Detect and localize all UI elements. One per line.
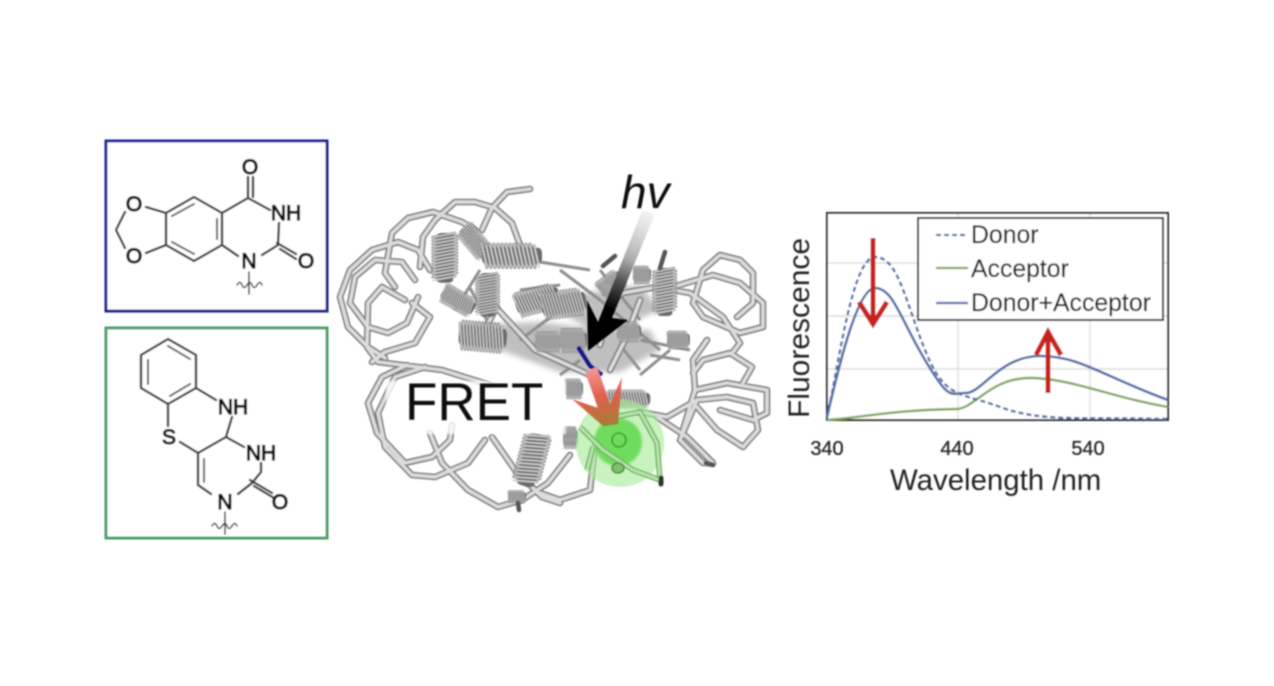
- legend: Donor: [971, 222, 1039, 249]
- x-axis ticks: 440: [940, 438, 974, 460]
- histone helices: [434, 222, 690, 502]
- atom labels: donor: O: [126, 245, 142, 268]
- arrow: acceptor increase: [1036, 332, 1061, 393]
- panel: acceptor nucleobase structure: [106, 328, 327, 538]
- arrow: donor decrease: [859, 238, 887, 324]
- legend: [918, 218, 1163, 320]
- FRET label backing band: [386, 381, 566, 434]
- donor stick: [578, 347, 602, 375]
- protein: nucleosome ribbon structure: [340, 189, 767, 510]
- legend: Donor+Acceptor: [971, 290, 1151, 317]
- green acceptor glow: [576, 399, 664, 487]
- central core strands: [455, 262, 690, 375]
- atom labels: donor: N: [241, 250, 257, 273]
- legend: Acceptor: [971, 256, 1069, 283]
- text: hv: hv: [621, 166, 673, 218]
- chart: fluorescence spectra: [783, 213, 1168, 497]
- atom labels: donor: O: [298, 250, 314, 273]
- atom labels: acceptor: NH: [246, 442, 276, 465]
- bonds: donor skeleton: [116, 177, 296, 294]
- curve: acceptor: [827, 378, 1168, 420]
- curve: donor: [827, 257, 1168, 419]
- text: FRET: FRET: [405, 373, 543, 432]
- central core shading: [470, 285, 660, 372]
- atom labels: donor: NH: [271, 202, 301, 225]
- atom labels: donor: O: [126, 193, 142, 216]
- x-axis ticks: 540: [1071, 438, 1105, 460]
- atom labels: acceptor: S: [162, 426, 176, 449]
- arrow: excitation light hv: [587, 211, 655, 351]
- panel: donor nucleobase structure: [106, 141, 327, 311]
- curve: donor plus acceptor: [827, 288, 1168, 417]
- x-axis ticks: [810, 438, 1105, 460]
- atom labels: acceptor: O: [272, 491, 288, 514]
- dark ribbon ends: [518, 252, 713, 510]
- atom labels: donor: O: [242, 156, 258, 179]
- x-axis title: Wavelength /nm: [890, 464, 1101, 497]
- DNA ribbons: [340, 189, 767, 507]
- arrow: energy transfer FRET: [572, 366, 622, 426]
- x-axis ticks: 340: [810, 438, 844, 460]
- atom labels: acceptor: NH: [218, 396, 248, 419]
- atom labels: acceptor: [162, 396, 288, 514]
- atom labels: acceptor: N: [217, 491, 233, 514]
- y-axis title: Fluorescence: [783, 238, 816, 418]
- atom labels: donor: [126, 156, 314, 273]
- plot frame and grid: [827, 213, 1168, 420]
- bonds: acceptor skeleton: [141, 339, 274, 534]
